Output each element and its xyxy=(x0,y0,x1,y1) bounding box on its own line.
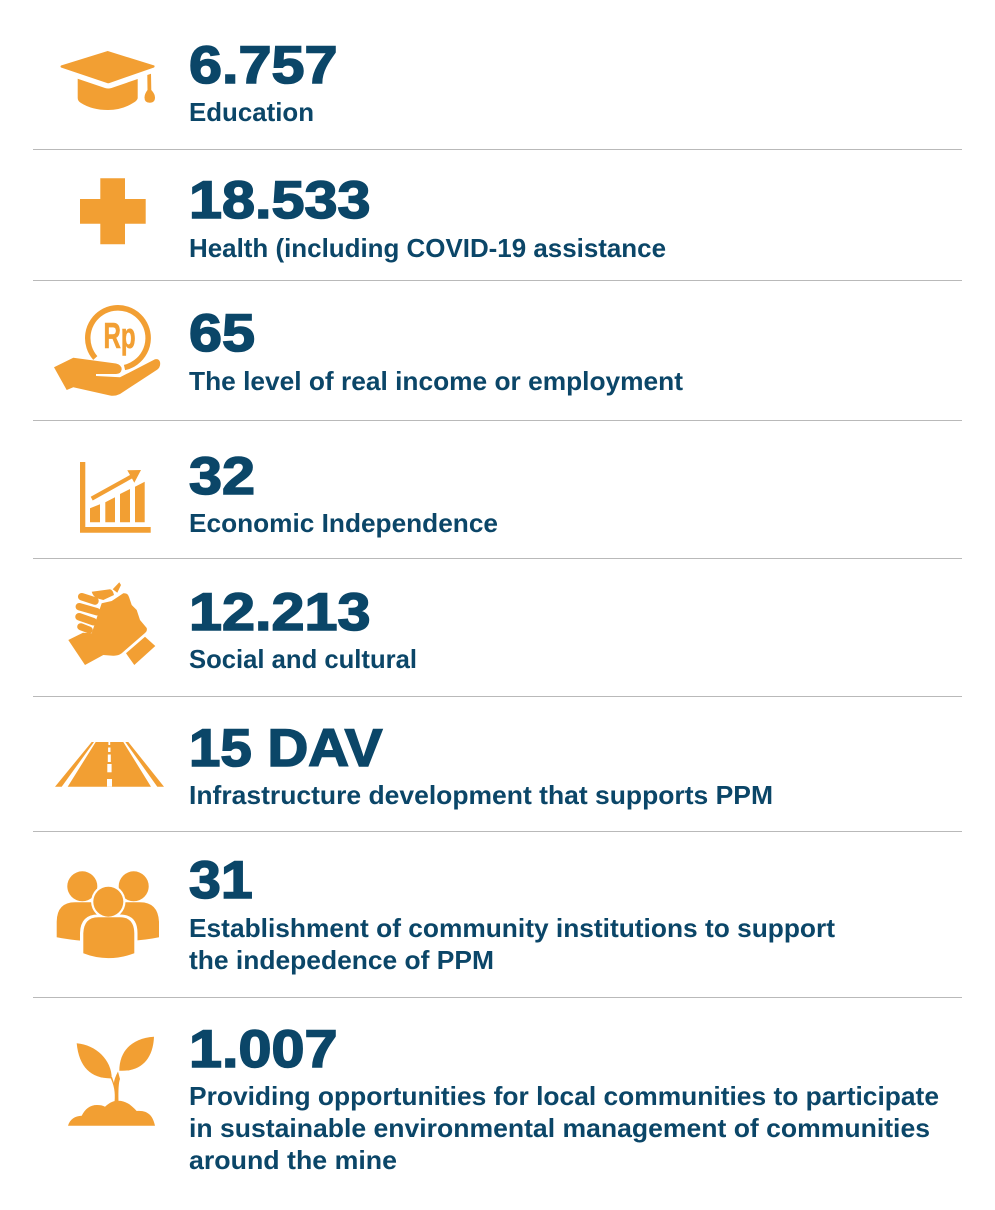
label: health: Health (including COVID-19 assistance xyxy=(189,233,666,263)
icon: graduation cap xyxy=(60,51,155,110)
label: community institutions xyxy=(189,913,835,975)
icon: road xyxy=(55,742,164,787)
value: 65: 65 xyxy=(189,303,255,362)
row: infrastructure xyxy=(55,718,773,810)
value: 18.533: 18.533 xyxy=(189,170,370,229)
row: education xyxy=(60,35,337,127)
label: environmental management: around the mine xyxy=(189,1145,397,1175)
icon: seedling xyxy=(68,1037,155,1126)
icon: hand holding coin: Rp xyxy=(104,316,136,356)
icon: clasped hands xyxy=(68,582,155,665)
value: 1.007: 1.007 xyxy=(189,1019,337,1078)
row: economic independence xyxy=(80,446,498,538)
label: community institutions: the indepedence of PPM xyxy=(189,945,494,975)
row: health xyxy=(80,170,666,263)
label: community institutions: Establishment of community institutions to support xyxy=(189,913,835,943)
value: 12.213: 12.213 xyxy=(189,582,370,641)
label: economic independence: Economic Independence xyxy=(189,508,498,538)
value: 31: 31 xyxy=(189,850,253,910)
value: 6.757: 6.757 xyxy=(189,35,337,94)
icon: group of people xyxy=(57,871,159,958)
value: 15 DAV: 15 DAV xyxy=(189,718,383,778)
label: environmental management: in sustainable environmental management of communities xyxy=(189,1113,930,1143)
row: social and cultural xyxy=(68,582,417,674)
value: 32: 32 xyxy=(189,446,255,505)
icon: growth chart xyxy=(80,462,151,533)
row: community institutions xyxy=(57,850,835,975)
label: infrastructure: Infrastructure development that supports PPM xyxy=(189,780,773,810)
label: income: The level of real income or employment xyxy=(189,366,683,396)
icon: hand holding coin xyxy=(54,308,160,396)
label: education: Education xyxy=(189,97,314,127)
label: social and cultural: Social and cultural xyxy=(189,644,417,674)
label: environmental management: Providing opportunities for local communities to participate xyxy=(189,1081,939,1111)
icon: medical cross xyxy=(80,178,146,244)
row: income xyxy=(54,303,683,396)
label: environmental management xyxy=(189,1081,939,1175)
row: environmental management xyxy=(68,1019,939,1175)
